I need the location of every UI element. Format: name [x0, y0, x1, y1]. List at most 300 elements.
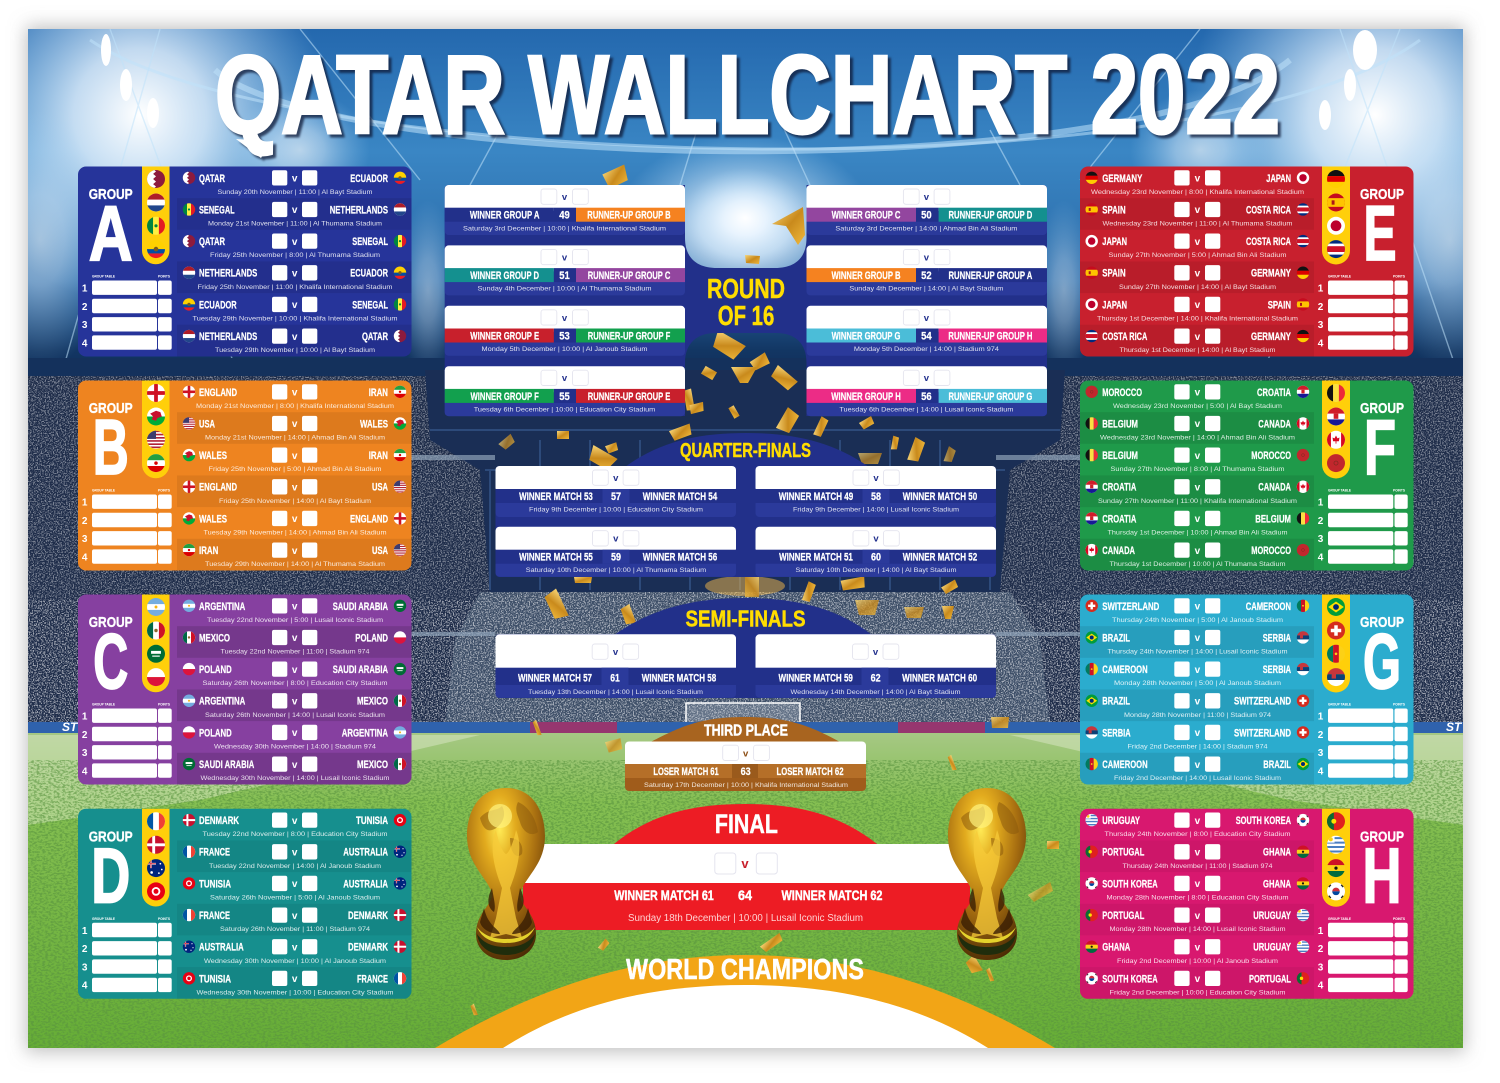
match: Ecuador v Senegal: ECUADOR	[199, 299, 237, 311]
group table: 4	[1318, 338, 1324, 349]
match: Netherlands v Ecuador: v	[292, 268, 298, 279]
group table: 2	[82, 730, 88, 741]
match: Tunisia v France: FRANCE	[357, 973, 388, 985]
match: Iran v USA: v	[292, 546, 298, 557]
match: Qatar v Senegal	[182, 234, 407, 259]
icon: trophy left	[467, 788, 545, 960]
panel: group F	[1080, 380, 1414, 571]
match: Mexico v Poland: POLAND	[355, 632, 388, 644]
match 53 card: v	[562, 313, 568, 324]
match: England v USA: v	[292, 482, 298, 493]
match 51 card: Sunday 4th December | 10:00 | Al Thumama Stadium	[478, 286, 652, 293]
match: Wales v England: v	[292, 514, 298, 525]
match: Cameroon v Brazil: v	[1195, 760, 1201, 771]
match: Ecuador v Senegal: Tuesday 29th November | 10:00 | Khalifa International Stadium	[192, 315, 398, 322]
match: Mexico v Poland: v	[292, 633, 298, 644]
match: Mexico v Poland: Tuesday 22nd November | 11:00 | Stadium 974	[220, 649, 370, 656]
match: Netherlands v Qatar: QATAR	[362, 331, 388, 343]
match: Portugal v Uruguay: Monday 28th November | 14:00 | Lusail Iconic Stadium	[1110, 926, 1286, 933]
match: Belgium v Canada: v	[1195, 419, 1201, 430]
match: Japan v Spain: v	[1195, 300, 1201, 311]
match 56 card: 56	[921, 391, 932, 403]
group table: 1	[82, 284, 88, 294]
match 49 card: 49	[559, 210, 570, 222]
match 51 card: WINNER GROUP D	[470, 270, 539, 282]
match: Brazil v Serbia: BRAZIL	[1102, 632, 1130, 644]
group table: 3	[82, 320, 88, 331]
match: Saudi Arabia v Mexico	[182, 756, 407, 782]
match 58 card	[756, 466, 996, 517]
match: Senegal v Netherlands: NETHERLANDS	[330, 204, 388, 216]
match: Tunisia v France	[182, 971, 407, 996]
match: Brazil v Serbia: SERBIA	[1263, 632, 1291, 644]
match: Cameroon v Brazil: BRAZIL	[1263, 759, 1291, 771]
match: Qatar v Senegal: QATAR	[199, 236, 225, 248]
match: Portugal v Uruguay: PORTUGAL	[1102, 910, 1144, 922]
match 52 card: RUNNER-UP GROUP A	[948, 270, 1032, 282]
heading: final: FINAL	[715, 809, 778, 839]
match: Wales v Iran: Friday 25th November | 5:00 | Ahmad Bin Ali Stadium	[208, 466, 382, 473]
match: Canada v Morocco: MOROCCO	[1251, 545, 1291, 557]
match: England v Iran	[182, 384, 407, 410]
match: Saudi Arabia v Mexico: MEXICO	[357, 759, 388, 771]
match: Japan v Spain: SPAIN	[1268, 299, 1291, 311]
match: England v USA: USA	[372, 482, 388, 494]
match 51 card: v	[562, 252, 568, 263]
match 62 card: Wednesday 14th December | 14:00 | Al Bayt Stadium	[790, 689, 961, 696]
match 62 card	[756, 634, 996, 698]
match: Saudi Arabia v Mexico: Wednesday 30th November | 14:00 | Lusail Iconic Stadium	[200, 775, 390, 782]
match 61 card: 61	[610, 672, 620, 684]
match 59 card: v	[613, 534, 619, 545]
group table: POINTS	[158, 917, 171, 921]
match: Costa Rica v Germany: GERMANY	[1251, 331, 1291, 343]
heading: group letter: GROUP	[1360, 187, 1404, 203]
flag strip	[1322, 594, 1350, 692]
match: Portugal v Ghana: Thursday 24th November | 11:00 | Stadium 974	[1122, 863, 1273, 870]
match 53 card: Monday 5th December | 10:00 | Al Janoub Stadium	[482, 346, 648, 353]
panel: third place	[625, 717, 866, 791]
heading: world champions: WORLD CHAMPIONS	[626, 954, 864, 986]
heading: group letter	[1360, 829, 1404, 919]
heading: group letter	[89, 615, 133, 705]
match: Japan v Costa Rica: Sunday 27th November | 5:00 | Ahmad Bin Ali Stadium	[1108, 252, 1287, 259]
match 59 card: WINNER MATCH 55	[519, 551, 593, 563]
match 62 card: v	[873, 647, 879, 658]
match: Denmark v Tunisia: v	[292, 816, 298, 827]
match: Argentina v Saudi Arabia	[182, 598, 407, 624]
match: France v Denmark: v	[292, 911, 298, 922]
match: Serbia v Switzerland: v	[1195, 728, 1201, 739]
match 57 card: v	[613, 473, 619, 484]
match: South Korea v Portugal: v	[1195, 974, 1201, 985]
match: Argentina v Mexico	[182, 693, 407, 719]
match: Argentina v Saudi Arabia: v	[292, 602, 298, 612]
match 55 card: 55	[559, 391, 570, 403]
group table: GROUP TABLE	[1328, 917, 1352, 921]
match: Brazil v Switzerland: v	[1195, 696, 1201, 707]
match 52 card	[806, 245, 1047, 295]
match 60 card	[756, 527, 996, 577]
match: Argentina v Saudi Arabia: SAUDI ARABIA	[333, 601, 388, 613]
match: Ecuador v Senegal: SENEGAL	[352, 299, 388, 311]
score boxes	[715, 853, 777, 874]
match: Wales v England: ENGLAND	[350, 513, 388, 525]
match: Saudi Arabia v Mexico: v	[292, 760, 298, 771]
match: France v Australia	[182, 844, 407, 870]
match: Australia v Denmark: Wednesday 30th November | 10:00 | Al Janoub Stadium	[204, 958, 386, 965]
group table: 1	[1318, 498, 1324, 508]
match: Brazil v Serbia: Thursday 24th November | 14:00 | Lusail Iconic Stadium	[1108, 649, 1288, 656]
match 52 card: v	[924, 252, 930, 263]
match: Wales v England	[182, 511, 407, 536]
match: Germany v Japan	[1085, 170, 1310, 196]
match 54 card: 54	[921, 330, 932, 342]
match: Poland v Argentina: POLAND	[199, 727, 232, 739]
panel: group C	[78, 594, 412, 785]
match: USA v Wales: v	[292, 419, 298, 430]
match 55 card	[445, 366, 685, 416]
group table: 4	[82, 338, 88, 349]
match: Spain v Costa Rica: Wednesday 23rd November | 11:00 | Al Thumama Stadium	[1102, 221, 1293, 228]
match: Mexico v Poland	[182, 630, 407, 656]
match: Croatia v Belgium: BELGIUM	[1255, 513, 1291, 525]
heading: group letter	[1360, 615, 1404, 705]
match: Spain v Costa Rica: COSTA RICA	[1246, 204, 1291, 216]
group table: GROUP TABLE	[92, 488, 116, 492]
match: Netherlands v Ecuador: ECUADOR	[350, 268, 388, 280]
match: France v Denmark: FRANCE	[199, 910, 230, 922]
match: Croatia v Belgium	[1085, 511, 1310, 536]
match 57 card: Friday 9th December | 10:00 | Education City Stadium	[529, 507, 703, 514]
match: Morocco v Croatia: CROATIA	[1257, 387, 1291, 399]
group table: 2	[1318, 730, 1324, 741]
match 51 card: RUNNER-UP GROUP C	[588, 270, 670, 282]
match: South Korea v Ghana: Monday 28th November | 8:00 | Education City Stadium	[1106, 894, 1289, 901]
match: Tunisia v Australia: v	[292, 879, 298, 890]
match 53 card: RUNNER-UP GROUP F	[588, 330, 670, 342]
match 52 card: Sunday 4th December | 14:00 | Al Bayt Stadium	[849, 286, 1004, 293]
match: Senegal v Netherlands: SENEGAL	[199, 204, 235, 216]
match: Wales v Iran: IRAN	[369, 450, 388, 462]
match: Cameroon v Serbia: Monday 28th November | 5:00 | Al Janoub Stadium	[1114, 680, 1281, 687]
match 50 card	[806, 185, 1047, 235]
heading: group letter: B	[93, 403, 129, 491]
match: Costa Rica v Germany: COSTA RICA	[1102, 331, 1147, 343]
match: Denmark v Tunisia: DENMARK	[199, 815, 239, 827]
match: Ecuador v Senegal	[182, 297, 407, 322]
match: France v Australia: FRANCE	[199, 847, 230, 859]
match: Argentina v Saudi Arabia: ARGENTINA	[199, 601, 245, 613]
match: Netherlands v Qatar: v	[292, 332, 298, 343]
group table: GROUP TABLE	[92, 274, 116, 278]
finalists	[614, 887, 883, 903]
match: Netherlands v Qatar: NETHERLANDS	[199, 331, 257, 343]
match 60 card: WINNER MATCH 52	[903, 551, 977, 563]
match: England v Iran: IRAN	[369, 387, 388, 399]
score boxes: v	[741, 856, 749, 871]
world champions arch	[435, 954, 1055, 1048]
match: Germany v Japan: JAPAN	[1266, 173, 1291, 185]
group table: POINTS	[158, 702, 171, 706]
match: Belgium v Canada: BELGIUM	[1102, 418, 1138, 430]
match 55 card: v	[562, 373, 568, 384]
match: Spain v Germany: v	[1195, 268, 1201, 279]
match: USA v Wales: Monday 21st November | 14:00 | Ahmad Bin Ali Stadium	[205, 435, 385, 442]
finalists: 64	[738, 887, 752, 903]
match 62 card: 62	[871, 672, 881, 684]
match 54 card: RUNNER-UP GROUP H	[948, 330, 1032, 342]
icon: trophy right	[948, 788, 1026, 960]
pitch	[28, 733, 1463, 1048]
match: Cameroon v Brazil	[1085, 756, 1310, 782]
match: France v Australia: AUSTRALIA	[343, 847, 388, 859]
group table: POINTS	[1393, 274, 1406, 278]
match: Tunisia v Australia: TUNISIA	[199, 878, 231, 890]
match 61 card	[496, 634, 736, 698]
match: Morocco v Croatia: v	[1195, 388, 1201, 398]
match 56 card: v	[924, 373, 930, 384]
match 63 card: Saturday 17th December | 10:00 | Khalifa International Stadium	[644, 782, 848, 789]
match: South Korea v Portugal	[1085, 971, 1310, 996]
match: Switzerland v Cameroon: Thursday 24th November | 5:00 | Al Janoub Stadium	[1112, 617, 1283, 624]
group table	[82, 702, 172, 778]
group table: 4	[82, 552, 88, 563]
match: Belgium v Morocco: Sunday 27th November | 8:00 | Al Thumama Stadium	[1110, 466, 1285, 473]
match: Japan v Costa Rica	[1085, 234, 1310, 259]
flag strip	[1322, 809, 1350, 907]
match 55 card: RUNNER-UP GROUP E	[588, 391, 670, 403]
match: USA v Wales: USA	[199, 418, 215, 430]
heading: group letter: C	[93, 617, 128, 705]
group table: 4	[1318, 981, 1324, 992]
match: Netherlands v Ecuador	[182, 265, 407, 291]
match 56 card: Tuesday 6th December | 14:00 | Lusail Iconic Stadium	[839, 407, 1014, 414]
match: Wales v Iran: v	[292, 451, 298, 462]
match: Tunisia v France: v	[292, 974, 298, 985]
group table	[1318, 702, 1408, 778]
match 53 card	[445, 306, 685, 356]
match: Costa Rica v Germany	[1085, 328, 1310, 354]
match: Qatar v Senegal: Friday 25th November | 8:00 | Al Thumama Stadium	[210, 252, 380, 259]
group table	[1318, 917, 1408, 992]
group table: 4	[82, 766, 88, 777]
heading: quarter-finals: QUARTER-FINALS	[680, 440, 811, 462]
match: Morocco v Croatia: Wednesday 23rd November | 5:00 | Al Bayt Stadium	[1113, 403, 1282, 410]
heading: round of 16: OF 16	[718, 300, 774, 331]
finalists: WINNER MATCH 61	[614, 887, 714, 903]
match: Serbia v Switzerland: Friday 2nd December | 14:00 | Stadium 974	[1128, 743, 1268, 750]
panel: group G	[1080, 594, 1414, 785]
match: Germany v Japan: Wednesday 23rd November | 8:00 | Khalifa International Stadium	[1091, 189, 1304, 196]
panel: group A	[78, 166, 412, 357]
match 61 card: v	[613, 647, 619, 658]
match: Poland v Argentina: ARGENTINA	[342, 727, 388, 739]
match: Serbia v Switzerland: SERBIA	[1102, 727, 1131, 739]
heading: third place: THIRD PLACE	[704, 722, 788, 740]
match 50 card: 50	[921, 210, 932, 222]
match: Spain v Germany: Sunday 27th November | 14:00 | Al Bayt Stadium	[1119, 284, 1276, 291]
match 54 card: Monday 5th December | 14:00 | Stadium 974	[854, 346, 999, 353]
flag strip	[1322, 380, 1350, 478]
match: Morocco v Croatia: MOROCCO	[1102, 387, 1142, 399]
group table: POINTS	[158, 488, 171, 492]
match: Switzerland v Cameroon: v	[1195, 602, 1201, 612]
group table: 3	[1318, 534, 1324, 545]
group table: GROUP TABLE	[92, 917, 116, 921]
match 63 card: LOSER MATCH 62	[776, 766, 844, 778]
match 57 card: WINNER MATCH 53	[519, 491, 593, 503]
match: Belgium v Morocco: BELGIUM	[1102, 450, 1138, 462]
group table: 3	[1318, 962, 1324, 973]
match: South Korea v Ghana: SOUTH KOREA	[1102, 878, 1158, 890]
match 50 card: v	[924, 192, 930, 203]
match: Japan v Costa Rica: COSTA RICA	[1246, 236, 1291, 248]
flag strip	[142, 166, 170, 264]
panel: group D	[78, 809, 412, 999]
match: Canada v Morocco	[1085, 542, 1310, 568]
match: Ghana v Uruguay	[1085, 939, 1310, 965]
match: Japan v Spain: Thursday 1st December | 14:00 | Khalifa International Stadium	[1097, 315, 1298, 322]
heading: group letter: F	[1364, 403, 1396, 491]
match: USA v Wales	[182, 416, 407, 442]
group table: 1	[82, 498, 88, 508]
heading: group letter: A	[89, 189, 133, 277]
flag strip	[142, 809, 170, 907]
group table: 1	[82, 926, 88, 937]
match: England v Iran: Monday 21st November | 8:00 | Khalifa International Stadium	[196, 403, 394, 410]
heading: semi-finals: SEMI-FINALS	[686, 606, 806, 632]
heading: group letter: GROUP	[89, 187, 133, 203]
match: Iran v USA: USA	[372, 545, 388, 557]
group table: 3	[82, 962, 88, 973]
match: Wales v England: WALES	[199, 513, 227, 525]
match 59 card: Saturday 10th December | 10:00 | Al Thumama Stadium	[526, 567, 707, 574]
match 54 card: v	[924, 313, 930, 324]
match: South Korea v Portugal: SOUTH KOREA	[1102, 973, 1158, 985]
heading: group letter	[89, 401, 133, 491]
heading: group letter: GROUP	[1360, 401, 1404, 417]
match: Spain v Germany	[1085, 265, 1310, 291]
group table: 2	[1318, 302, 1324, 313]
match: Portugal v Uruguay: v	[1195, 911, 1201, 922]
match: Senegal v Netherlands	[182, 202, 407, 228]
match: Poland v Argentina: Wednesday 30th November | 14:00 | Stadium 974	[214, 743, 376, 750]
heading: group letter: E	[1364, 189, 1396, 277]
heading: group letter: GROUP	[1360, 615, 1404, 631]
match 50 card: RUNNER-UP GROUP D	[948, 210, 1032, 222]
match: Brazil v Serbia: v	[1195, 633, 1201, 644]
group table	[82, 917, 172, 992]
match: Cameroon v Brazil: CAMEROON	[1102, 759, 1148, 771]
group table: 1	[1318, 926, 1324, 937]
match: Uruguay v South Korea: v	[1195, 816, 1201, 827]
match: Poland v Saudi Arabia: v	[292, 665, 298, 676]
match: Uruguay v South Korea: SOUTH KOREA	[1236, 815, 1291, 827]
match: Mexico v Poland: MEXICO	[199, 632, 230, 644]
group table: POINTS	[1393, 917, 1406, 921]
match 61 card: WINNER MATCH 58	[642, 672, 716, 684]
match: Switzerland v Cameroon: CAMEROON	[1246, 601, 1291, 613]
match: Senegal v Netherlands: v	[292, 205, 298, 216]
confetti	[470, 164, 1059, 1016]
match: Uruguay v South Korea: URUGUAY	[1102, 815, 1140, 827]
match: Japan v Costa Rica: JAPAN	[1102, 236, 1127, 248]
match: Germany v Japan: GERMANY	[1102, 173, 1143, 185]
group table: 1	[1318, 712, 1324, 722]
match: England v USA: Friday 25th November | 14:00 | Al Bayt Stadium	[219, 498, 371, 505]
match: Canada v Morocco: CANADA	[1102, 545, 1135, 557]
match 61 card: WINNER MATCH 57	[518, 672, 592, 684]
match: Netherlands v Qatar	[182, 328, 407, 354]
match 55 card: Tuesday 6th December | 10:00 | Education City Stadium	[474, 407, 656, 414]
match: Portugal v Uruguay	[1085, 907, 1310, 933]
heading: group letter	[89, 829, 133, 919]
match: Australia v Denmark: AUSTRALIA	[199, 942, 244, 954]
match: South Korea v Ghana: v	[1195, 879, 1201, 890]
stand roof behind the knockout rounds	[425, 370, 1065, 592]
group table: GROUP TABLE	[1328, 702, 1352, 706]
match: England v Iran: v	[292, 388, 298, 398]
match 60 card: WINNER MATCH 51	[779, 551, 853, 563]
group table: 1	[82, 712, 88, 722]
match 56 card: WINNER GROUP H	[831, 391, 901, 403]
match: Netherlands v Qatar: Tuesday 29th November | 10:00 | Al Bayt Stadium	[215, 347, 375, 354]
match 59 card	[496, 527, 736, 577]
match: Wales v England: Tuesday 29th November | 14:00 | Ahmad Bin Ali Stadium	[204, 529, 387, 536]
match: France v Denmark	[182, 907, 407, 933]
match 61 card: Tuesday 13th December | 14:00 | Lusail Iconic Stadium	[528, 689, 703, 696]
match: Uruguay v South Korea	[1085, 812, 1310, 838]
match: South Korea v Portugal: PORTUGAL	[1249, 973, 1291, 985]
match: Qatar v Ecuador: v	[292, 174, 298, 184]
match: Iran v USA: IRAN	[199, 545, 218, 557]
match: Ghana v Uruguay: v	[1195, 942, 1201, 953]
match: Spain v Costa Rica: SPAIN	[1102, 204, 1126, 216]
match: Argentina v Mexico: v	[292, 696, 298, 707]
panel: group E	[1080, 166, 1414, 357]
match: England v Iran: ENGLAND	[199, 387, 237, 399]
match: Germany v Japan: v	[1195, 174, 1201, 184]
heading: group letter: G	[1363, 617, 1401, 705]
match: England v USA: ENGLAND	[199, 482, 237, 494]
match 53 card: 53	[559, 330, 570, 342]
match 49 card: WINNER GROUP A	[470, 210, 540, 222]
match 50 card: WINNER GROUP C	[832, 210, 900, 222]
match: Switzerland v Cameroon: SWITZERLAND	[1102, 601, 1159, 613]
match: Ghana v Uruguay: Friday 2nd December | 10:00 | Al Janoub Stadium	[1117, 958, 1278, 965]
match: Qatar v Senegal: SENEGAL	[352, 236, 388, 248]
match: Belgium v Morocco	[1085, 448, 1310, 473]
match: Brazil v Switzerland	[1085, 693, 1310, 719]
match: Belgium v Canada: Wednesday 23rd November | 14:00 | Ahmad Bin Ali Stadium	[1100, 435, 1295, 442]
match 51 card: 51	[559, 270, 570, 282]
match: Costa Rica v Germany: Thursday 1st December | 14:00 | Al Bayt Stadium	[1120, 347, 1276, 354]
match: Poland v Argentina: v	[292, 728, 298, 739]
match: Qatar v Ecuador: Sunday 20th November | 11:00 | Al Bayt Stadium	[218, 189, 373, 196]
group table: 4	[1318, 766, 1324, 777]
group table: 2	[1318, 516, 1324, 527]
match: Poland v Argentina	[182, 725, 407, 750]
match: Belgium v Morocco: MOROCCO	[1251, 450, 1291, 462]
match: Portugal v Ghana: GHANA	[1263, 847, 1291, 859]
group table: POINTS	[1393, 488, 1406, 492]
match 49 card: RUNNER-UP GROUP B	[587, 210, 671, 222]
match 54 card: WINNER GROUP G	[832, 330, 900, 342]
match 49 card	[445, 185, 685, 235]
match: Qatar v Ecuador: QATAR	[199, 173, 225, 185]
match: France v Australia: Tuesday 22nd November | 14:00 | Al Janoub Stadium	[209, 863, 381, 870]
